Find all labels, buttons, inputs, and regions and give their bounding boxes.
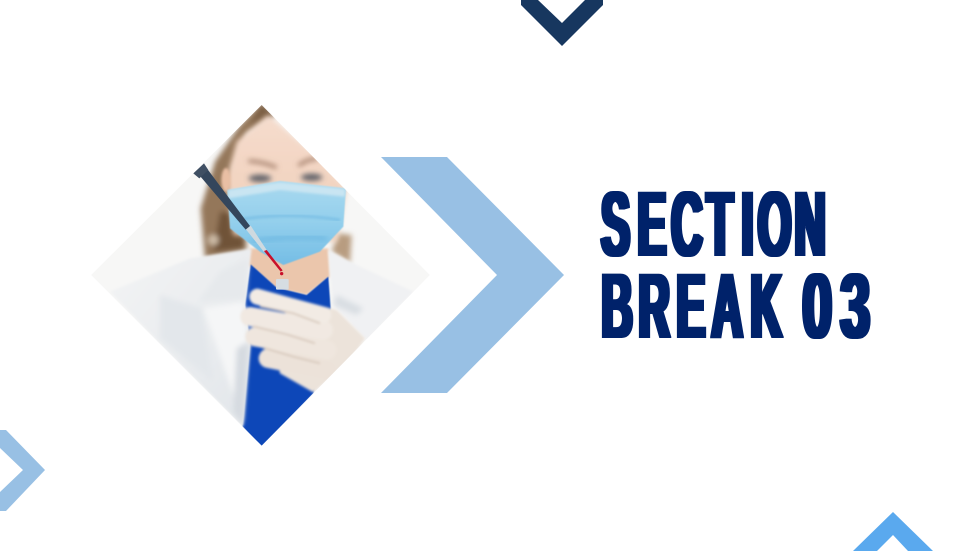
large light blue chevron arrow [381, 157, 564, 393]
title line 2: BREAK [602, 256, 782, 358]
icon: top navy chevron [521, 0, 603, 46]
title line 1: SECTION [601, 174, 826, 276]
surgical mask [227, 181, 346, 265]
neck [248, 248, 330, 295]
pipette [193, 163, 283, 275]
coat folds [160, 258, 363, 423]
face [227, 115, 347, 242]
lab coat left [131, 248, 252, 428]
eyes and brows [248, 159, 322, 182]
finger 4 [268, 358, 327, 370]
title: SECTION BREAK 03 [601, 174, 870, 358]
title number: 03 [802, 254, 870, 357]
icon: left light blue chevron [0, 430, 45, 511]
palm [273, 298, 365, 392]
icon: bottom right blue chevron [853, 512, 933, 551]
vial [276, 279, 289, 290]
diamond photo: lab technician with pipette [91, 102, 430, 448]
lab coat right [327, 250, 352, 276]
photo backdrop [92, 144, 430, 306]
finger 1 [257, 297, 323, 315]
creases [253, 306, 320, 363]
finger 2 [250, 317, 323, 330]
blue scrubs [243, 264, 331, 448]
gloved hand [250, 297, 365, 392]
ear [221, 168, 231, 192]
hair [201, 102, 352, 263]
finger 3 [255, 337, 327, 350]
